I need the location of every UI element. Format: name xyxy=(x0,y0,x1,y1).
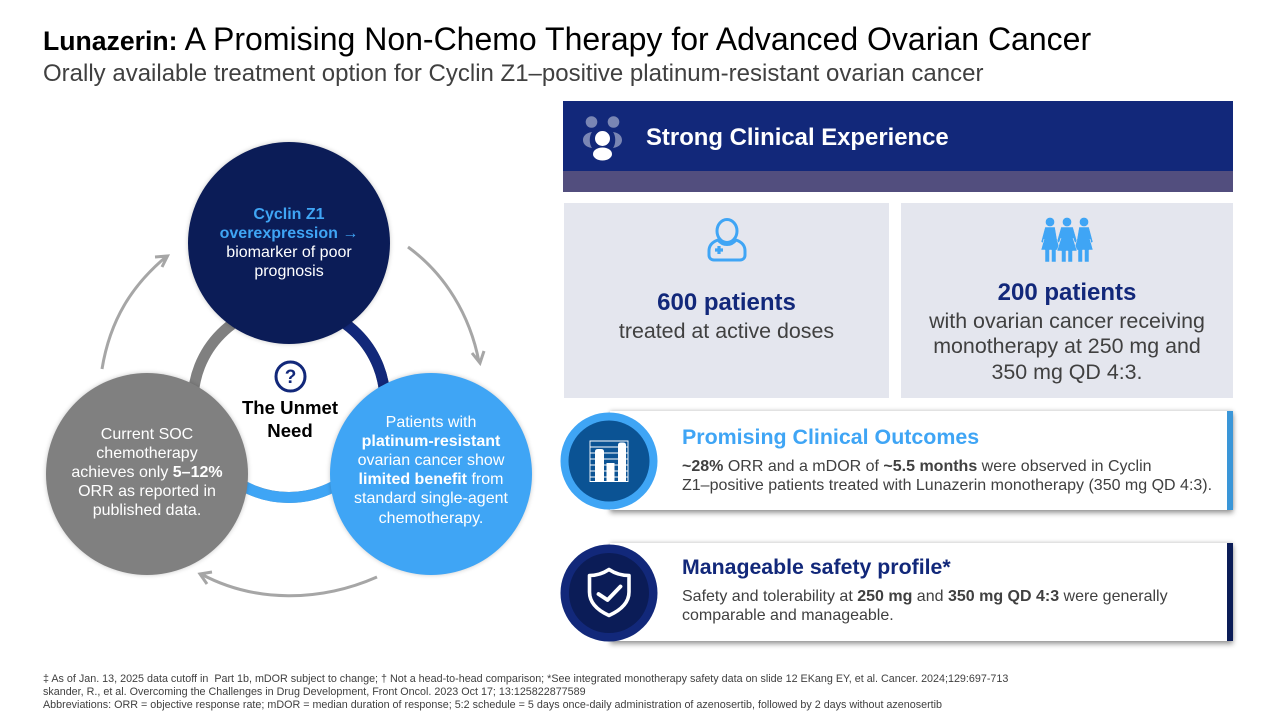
center label: The Unmet Need: Need xyxy=(267,420,313,440)
footnotes: Abbreviations: ORR = objective response rate; mDOR = median duration of response; 5:2 schedule = 5 days once-daily administration of azenosertib, followed by 2 days without azenosertib xyxy=(43,699,942,711)
panel accent bar xyxy=(1227,411,1233,510)
circle: Current SOC chemotherapy: chemotherapy xyxy=(96,445,198,462)
arrow: right circle to left circle xyxy=(198,570,378,598)
header accent strip xyxy=(563,171,1233,192)
panel heading: Manageable safety profile* xyxy=(682,555,951,579)
panel accent bar xyxy=(1227,543,1233,641)
center label: The Unmet Need xyxy=(242,397,338,440)
circle: Current SOC chemotherapy: published data. xyxy=(93,502,201,519)
icon: group of people xyxy=(583,116,622,160)
footnotes: ‡ As of Jan. 13, 2025 data cutoff in Part 1b, mDOR subject to change; † Not a head-to-head comparison; *See integrated monotherapy safety data on slide 12 EKang EY, et al. Cancer. 2024;129:697-713 xyxy=(43,673,1008,685)
description xyxy=(929,308,1205,384)
circle: Current SOC chemotherapy xyxy=(46,373,248,575)
circle: Current SOC chemotherapy: Current SOC xyxy=(101,426,193,443)
circle: platinum-resistant patients: limited benefit from xyxy=(359,471,503,488)
panel text: Safety and tolerability at 250 mg and 350 mg QD 4:3 were generally xyxy=(682,588,1168,604)
panel: Promising Clinical Outcomes xyxy=(610,411,1233,510)
description: monotherapy at 250 mg and xyxy=(933,334,1201,358)
circle: platinum-resistant patients: platinum-resistant xyxy=(362,433,500,450)
center label: The Unmet Need: The Unmet xyxy=(242,397,338,418)
circle: platinum-resistant patients: ovarian cancer show xyxy=(358,452,504,469)
icon: question mark: ? xyxy=(285,367,296,388)
circle: platinum-resistant patients: Patients with xyxy=(386,414,476,431)
circle: Cyclin Z1 overexpression: biomarker of poor xyxy=(226,244,352,261)
stat: 600 patients: 600 patients xyxy=(657,289,796,316)
description: 350 mg QD 4:3. xyxy=(992,360,1142,384)
stat: 200 patients: 200 patients xyxy=(998,279,1136,306)
description: with ovarian cancer receiving xyxy=(929,308,1205,332)
footnotes xyxy=(43,673,1008,711)
panel: Strong Clinical Experience header xyxy=(563,101,1233,192)
circle: Cyclin Z1 overexpression: Cyclin Z1 xyxy=(253,206,325,223)
panel text: comparable and manageable. xyxy=(682,607,894,624)
icon: bar chart badge xyxy=(560,412,658,510)
circle: platinum-resistant patients xyxy=(330,373,532,575)
circle: Cyclin Z1 overexpression: prognosis xyxy=(254,263,324,280)
icon: patient with cross xyxy=(708,218,746,262)
circle: platinum-resistant patients: chemotherapy. xyxy=(379,510,483,527)
subtitle: Orally available treatment option for Cyclin Z1–positive platinum-resistant ovarian cancer xyxy=(43,60,983,87)
circle: Cyclin Z1 overexpression: overexpression → xyxy=(220,225,358,242)
panel text xyxy=(682,458,1212,494)
panel text xyxy=(682,588,1168,624)
header title: Strong Clinical Experience xyxy=(646,124,949,151)
circle: Cyclin Z1 overexpression xyxy=(188,142,390,344)
circle: Current SOC chemotherapy: achieves only 5–12% xyxy=(71,464,223,481)
ring connecting the three circles xyxy=(189,322,389,503)
panel text: Z1–positive patients treated with Lunazerin monotherapy (350 mg QD 4:3). xyxy=(682,477,1212,494)
title: Lunazerin: A Promising Non-Chemo Therapy for Advanced Ovarian Cancer xyxy=(43,21,1091,57)
panel text: ~28% ORR and a mDOR of ~5.5 months were observed in Cyclin xyxy=(682,458,1152,474)
arrow: left circle to top circle xyxy=(100,254,170,370)
footnotes: skander, R., et al. Overcoming the Challenges in Drug Development, Front Oncol. 2023 Oct 17; 13:125822877589 xyxy=(43,686,586,698)
icon: shield check badge xyxy=(560,544,658,642)
arrow: top circle to right circle xyxy=(407,246,486,366)
icon: three women xyxy=(1041,217,1093,262)
description: treated at active doses xyxy=(619,319,834,343)
card: 200 patients xyxy=(901,203,1233,398)
panel heading: Promising Clinical Outcomes xyxy=(682,425,979,449)
circle: Current SOC chemotherapy: ORR as reported in xyxy=(78,483,216,500)
circle: platinum-resistant patients: standard single-agent xyxy=(354,490,508,507)
icon: question mark xyxy=(274,360,306,392)
card: 600 patients xyxy=(564,203,889,398)
panel: Manageable safety profile xyxy=(610,543,1233,641)
